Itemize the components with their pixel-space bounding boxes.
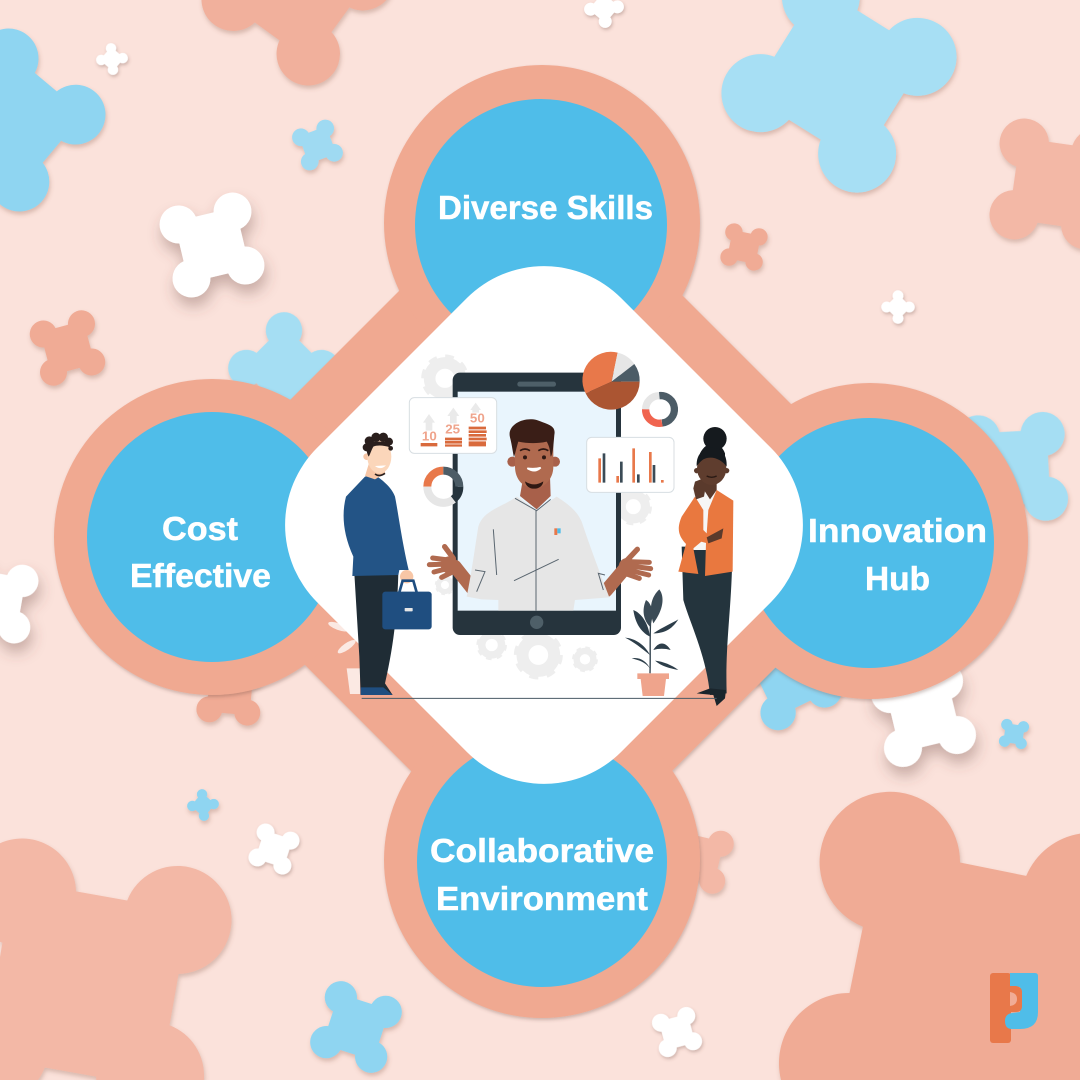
heading: Cost Effective xyxy=(130,510,271,594)
left man with briefcase xyxy=(344,433,432,695)
panel: collaborative environment circle xyxy=(417,737,667,987)
logo xyxy=(990,973,1038,1043)
heading: Cost Effective: Cost xyxy=(162,510,238,547)
center man presenter xyxy=(429,419,651,611)
panel: diverse skills circle xyxy=(415,99,667,351)
card: growth coins: 10 xyxy=(422,429,437,444)
tablet device xyxy=(453,373,621,635)
card: growth coins: 50 xyxy=(470,410,485,425)
heading: Collaborative Environment: Collaborative xyxy=(430,832,654,869)
heading: Cost Effective: Effective xyxy=(130,557,271,594)
donut chart small xyxy=(646,396,674,423)
heading: Innovation Hub: Hub xyxy=(865,560,930,597)
card: growth coins: 25 xyxy=(445,421,461,436)
card: growth coins xyxy=(409,398,497,453)
icon: background gears xyxy=(424,357,650,677)
decorative white blobs xyxy=(0,189,980,771)
central white diamond xyxy=(240,221,848,829)
panel: innovation hub circle xyxy=(744,418,994,668)
right woman with arms crossed xyxy=(678,427,733,706)
heading: Collaborative Environment xyxy=(430,832,654,917)
ground line xyxy=(362,697,717,700)
decorative leaves and pot xyxy=(327,585,360,694)
pie chart xyxy=(582,352,640,410)
heading: Collaborative Environment: Environment xyxy=(436,880,648,917)
central illustration xyxy=(327,352,733,706)
card: bar chart xyxy=(587,437,674,492)
heading: Innovation Hub: Innovation xyxy=(808,512,987,549)
potted plant xyxy=(625,589,678,696)
decorative small white blobs xyxy=(94,0,917,1059)
donut chart left xyxy=(427,471,459,503)
heading: Innovation Hub xyxy=(808,512,987,597)
heading: Diverse Skills: Diverse Skills xyxy=(438,189,653,226)
central diagram frame xyxy=(54,65,1028,1018)
panel: cost effective circle xyxy=(87,412,337,662)
